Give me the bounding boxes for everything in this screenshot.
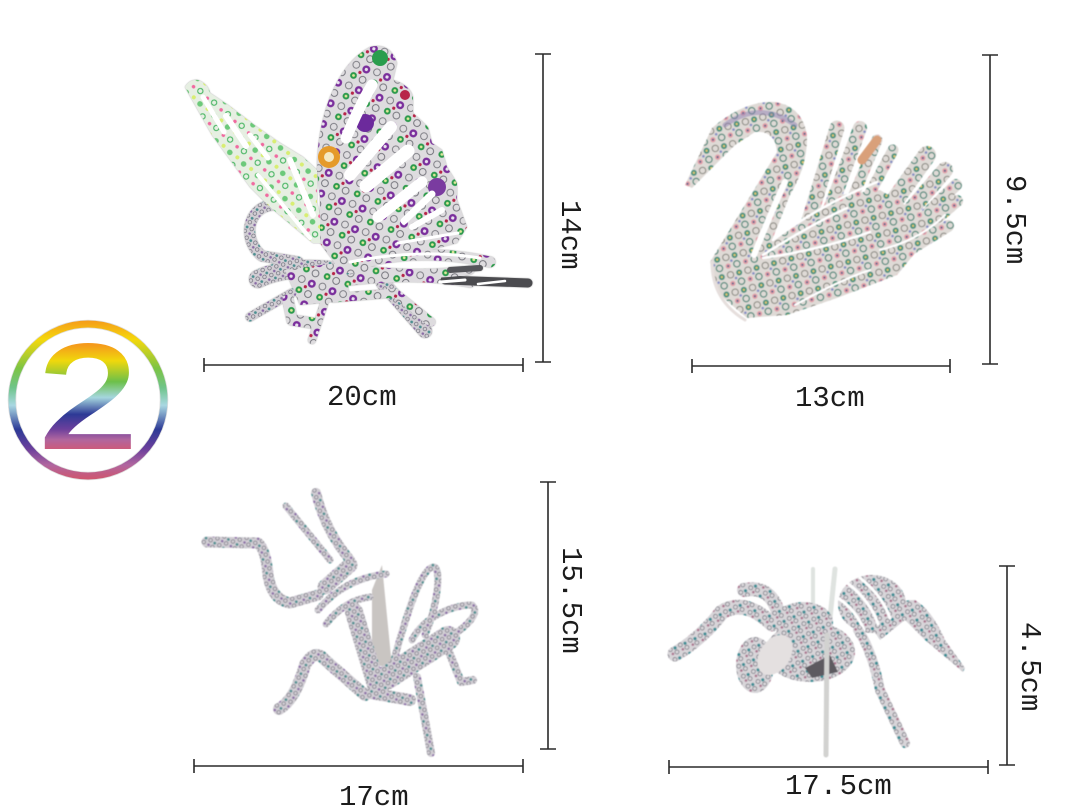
spider lower legs	[826, 630, 905, 755]
mantis front arm	[207, 542, 318, 603]
spider model	[675, 569, 965, 755]
badge numeral: 2	[38, 315, 137, 478]
mantis hind body	[386, 638, 448, 678]
spider shadow under body	[805, 655, 838, 678]
swan feathers	[800, 128, 957, 262]
dimension: butterfly width: 20cm	[327, 381, 397, 414]
butterfly right wing	[317, 46, 467, 270]
dimension: spider width	[669, 760, 988, 803]
dimension: spider width: 17. 5cm	[785, 770, 892, 803]
badge: number 2	[12, 315, 164, 478]
dimension: mantis height: 15. 5cm	[554, 547, 587, 654]
spider abdomen	[838, 575, 906, 633]
swan wing slits	[763, 182, 945, 305]
spider upper legs	[675, 589, 965, 672]
mantis wings	[394, 567, 475, 660]
butterfly model	[185, 46, 528, 340]
mantis legs	[279, 647, 473, 753]
dimension: spider height	[999, 566, 1046, 765]
swan body and neck	[685, 102, 930, 318]
butterfly tail and body curl	[250, 205, 350, 305]
dimension: swan width	[692, 359, 950, 415]
dimension: butterfly height: 14cm	[553, 200, 586, 270]
dimension: swan height	[982, 55, 1031, 364]
butterfly left wing	[185, 80, 327, 243]
badge ring	[12, 324, 164, 476]
spider cephalothorax	[765, 622, 855, 682]
swan neck gap	[754, 182, 785, 255]
spider front plate	[750, 628, 800, 682]
swan model	[685, 102, 957, 320]
dimension: spider height: 4. 5cm	[1013, 622, 1046, 711]
mantis thorax fan	[372, 565, 392, 667]
butterfly right wing cutouts	[346, 85, 480, 262]
butterfly legs	[250, 283, 431, 340]
spider head	[736, 637, 774, 693]
dimension: butterfly height	[535, 54, 586, 362]
dimension: swan width: 13cm	[795, 382, 865, 415]
butterfly wing motifs	[318, 50, 446, 196]
mantis head	[325, 565, 350, 587]
spider rear shell	[773, 602, 833, 642]
mantis central column	[354, 612, 376, 685]
swan under edge	[712, 262, 745, 320]
swan head band	[725, 112, 795, 125]
mantis antennae	[286, 493, 350, 560]
spider pins	[813, 569, 835, 618]
dimension: mantis width	[194, 759, 523, 806]
dimension: mantis height	[540, 482, 587, 749]
butterfly lower wing fingers	[345, 255, 528, 284]
mantis thorax arcs	[318, 574, 386, 624]
butterfly left wing cutouts	[203, 97, 313, 238]
dimension: butterfly width	[204, 358, 523, 414]
spider abdomen ribs	[838, 578, 890, 630]
dimension: swan height: 9. 5cm	[998, 175, 1031, 264]
mantis model	[207, 493, 475, 753]
